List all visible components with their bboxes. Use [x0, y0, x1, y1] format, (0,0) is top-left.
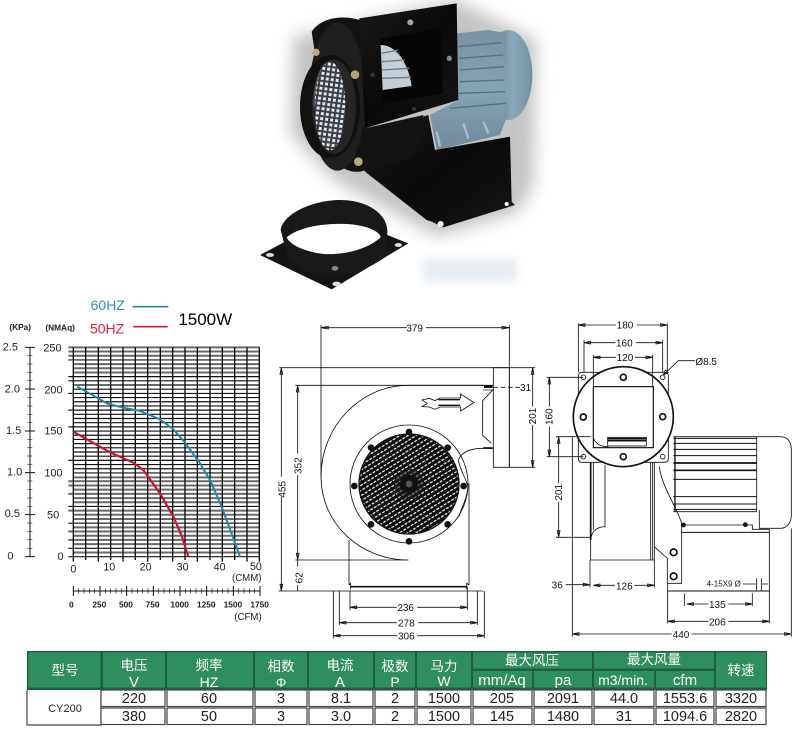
table values: 60 — [201, 691, 217, 707]
table values: 2 — [391, 691, 399, 707]
table values: 145 — [490, 709, 514, 725]
table header: 型号 — [52, 663, 78, 678]
left pressure axis: 50 — [47, 509, 59, 521]
icon: base bracket — [365, 115, 515, 227]
dimension labels: 352 — [293, 457, 304, 474]
table values: 50 — [201, 709, 217, 725]
left pressure axis: 100 — [44, 467, 63, 479]
dimension labels: 4-15X9 Ø — [707, 580, 741, 589]
CFM scale: 0 — [69, 599, 74, 609]
table header: 极数 — [382, 659, 409, 674]
table header: 电流 — [326, 658, 354, 673]
table values: 1094.6 — [663, 709, 707, 725]
side view drawing — [545, 321, 791, 641]
dimension labels: 180 — [617, 321, 634, 332]
left pressure axis: 0 — [7, 550, 13, 562]
specification table — [27, 651, 767, 725]
table header: pa — [555, 672, 572, 689]
dimension labels: 135 — [709, 600, 726, 611]
dimension labels: 160 — [545, 408, 556, 425]
performance chart — [3, 297, 269, 623]
table values: 3.0 — [331, 709, 351, 725]
CFM scale: 1750 — [250, 599, 269, 609]
table header: V — [129, 674, 139, 691]
dimension labels: 440 — [673, 630, 690, 641]
dimension lines — [278, 325, 535, 638]
table values: 2820 — [725, 709, 757, 725]
left pressure axis: 200 — [44, 384, 63, 396]
curve: 60 Hz — [77, 387, 240, 557]
left pressure axis: 0.5 — [5, 508, 20, 520]
table header: 频率 — [196, 657, 222, 673]
table rows — [27, 690, 766, 725]
left pressure axis: 2.0 — [5, 383, 20, 395]
dimension labels: Ø8.5 — [695, 357, 717, 368]
table values — [48, 691, 757, 725]
table header — [27, 651, 767, 691]
table header: mm/Aq — [478, 672, 526, 689]
legend and power label: 60HZ — [91, 297, 125, 313]
dimension labels — [545, 321, 741, 641]
table header: 相数 — [268, 659, 295, 674]
table values: 2091 — [547, 691, 579, 707]
dimension labels: 62 — [295, 572, 306, 583]
dimension labels: 31 — [520, 383, 532, 394]
dimension labels: 379 — [406, 323, 423, 334]
icon: motor — [430, 30, 532, 150]
dimension labels: 278 — [398, 618, 415, 629]
table values: 205 — [490, 691, 514, 707]
CMM axis labels: 50 — [250, 561, 262, 573]
fan inlet grille — [350, 425, 468, 545]
table values: 3 — [277, 709, 285, 725]
icon: volute housing — [312, 17, 423, 172]
table values: 380 — [122, 709, 146, 725]
table values: 3320 — [725, 691, 757, 707]
CMM axis labels: 40 — [214, 562, 226, 574]
legend and power label: 1500W — [178, 310, 232, 329]
icon: airflow arrow — [422, 394, 474, 411]
table values: 220 — [122, 691, 146, 707]
dimension labels: 206 — [709, 617, 726, 628]
axis units — [9, 322, 75, 333]
table header: P — [390, 674, 400, 690]
left pressure axis: 0 — [57, 551, 63, 563]
table values: 1500 — [428, 709, 460, 725]
table header: A — [335, 674, 345, 691]
table header: 最大风量 — [627, 652, 681, 667]
CMM axis labels: 10 — [103, 562, 115, 574]
left pressure axis: 1.0 — [7, 466, 22, 478]
left pressure axis: 1.5 — [6, 425, 21, 437]
table values: 8.1 — [331, 691, 351, 707]
icon: ring flange — [260, 200, 408, 289]
housing outline — [321, 368, 509, 591]
table values: CY200 — [48, 703, 82, 715]
dimension labels: 201 — [528, 407, 539, 424]
CMM axis labels: (CMM) — [232, 573, 261, 584]
left pressure axis: 250 — [43, 342, 62, 354]
table values: 1500 — [428, 691, 460, 707]
axis units: (KPa) — [9, 322, 31, 332]
legend and power label — [90, 297, 232, 336]
table header: W — [437, 673, 451, 689]
front view drawing — [277, 323, 539, 642]
motor — [673, 437, 791, 528]
photo: blower and inlet flange — [260, 0, 537, 289]
icon: inlet with mesh — [300, 49, 363, 166]
flange and round face — [573, 367, 673, 467]
CMM axis labels — [70, 561, 262, 584]
table header: m3/min. — [598, 672, 648, 688]
dimension labels: 455 — [277, 481, 288, 498]
dimension labels: 160 — [616, 338, 633, 349]
CFM scale: 1250 — [197, 599, 216, 609]
table header: HZ — [200, 674, 219, 690]
fan housing and bracket — [591, 463, 769, 591]
dimension labels: 236 — [397, 603, 414, 614]
CFM scale: 1500 — [224, 599, 243, 609]
legend and power label: 50HZ — [90, 320, 125, 336]
table values: 1553.6 — [663, 691, 707, 707]
table header: 转速 — [728, 663, 754, 678]
curve: 50 Hz — [73, 432, 188, 557]
dimension labels — [277, 323, 539, 642]
CFM scale: 500 — [119, 599, 133, 609]
left pressure axis: 2.5 — [3, 341, 18, 353]
left pressure axis: 150 — [44, 425, 63, 437]
grid — [68, 347, 259, 562]
table header: 最大风压 — [505, 653, 559, 668]
dimension labels: 36 — [552, 581, 563, 592]
CMM axis labels: 20 — [140, 562, 152, 574]
CFM scale: 250 — [92, 599, 107, 609]
dimension labels: 306 — [398, 631, 415, 642]
table values: 31 — [616, 709, 632, 725]
icon: outlet flange — [359, 3, 458, 128]
table header: 马力 — [430, 659, 458, 674]
dimension lines — [547, 323, 791, 637]
table header: 电压 — [120, 658, 148, 673]
dimension labels: 120 — [617, 353, 634, 364]
axis units: (NMAq) — [45, 323, 75, 333]
CFM scale: (CFM) — [234, 612, 262, 623]
table values: 2 — [391, 709, 399, 725]
CMM axis labels: 30 — [177, 562, 189, 574]
dimension labels: 126 — [616, 581, 633, 592]
table values: 1480 — [547, 709, 579, 725]
table header: cfm — [673, 672, 697, 689]
CFM scale — [69, 586, 269, 623]
table values: 3 — [277, 691, 285, 707]
CFM scale: 1000 — [170, 599, 189, 609]
CMM axis labels: 0 — [70, 563, 76, 575]
CFM scale: 750 — [146, 599, 160, 609]
left pressure axis — [3, 341, 63, 563]
dimension labels: 201 — [554, 484, 565, 501]
table values: 44.0 — [610, 691, 638, 707]
table header: Φ — [276, 675, 286, 690]
